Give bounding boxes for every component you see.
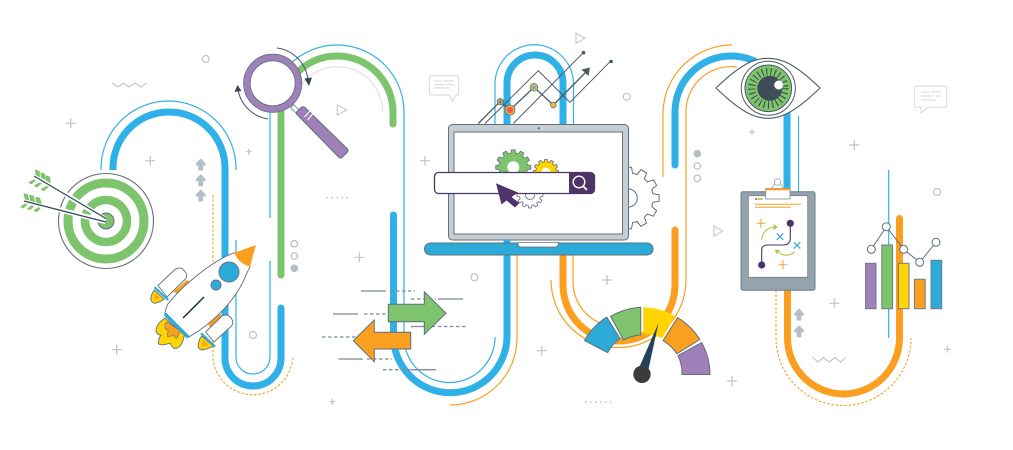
gear outline [598, 167, 659, 229]
thin orange dashed arc left [213, 195, 293, 395]
thin orange outer arc under gauge [551, 67, 737, 348]
background decorations [66, 33, 951, 405]
orange arrow [353, 320, 411, 362]
thick trend line [478, 72, 586, 124]
thin orange inner arc under gauge [573, 250, 600, 323]
target bullseye [98, 213, 114, 229]
gauge orange segment [663, 318, 700, 354]
gauge yellow segment [643, 307, 675, 338]
chart: bar and line chart [866, 223, 942, 309]
gauge needle [637, 323, 658, 376]
laptop frame [448, 124, 628, 240]
speech bubble left [429, 76, 459, 101]
gauge blue segment [584, 317, 620, 353]
winding road lines [101, 45, 911, 406]
booster flame centres [155, 294, 208, 346]
rotation arrows [238, 48, 308, 119]
green gear [496, 150, 531, 185]
white gear hub [526, 190, 534, 200]
thin blue line behind chart [888, 170, 890, 338]
clip orange strip [766, 188, 790, 190]
lens rim [247, 58, 298, 109]
thick blue road first loop [113, 112, 281, 386]
speed lines solid [333, 291, 463, 370]
gauge purple segment [678, 342, 710, 374]
speed lines dashed [322, 291, 466, 370]
paper colour dots [755, 198, 762, 200]
pupil [757, 76, 782, 101]
icon: clipboard [741, 179, 815, 290]
decoration: triple dots right [694, 150, 700, 182]
yellow gear hub [542, 168, 550, 176]
icon: direction arrows with speed lines [322, 291, 466, 370]
decoration: triple dots left [291, 240, 297, 271]
gear hub [619, 189, 637, 207]
arrow heads [234, 78, 312, 92]
thin blue line below eye [798, 116, 800, 195]
thin blue line second loop [236, 45, 495, 382]
laptop screen [454, 132, 622, 234]
handle [296, 107, 348, 158]
laptop camera [538, 127, 540, 130]
zigzag trend arrow [485, 62, 610, 124]
panel: laptop [424, 124, 653, 255]
thick green road [281, 56, 393, 275]
decoration: up arrows left [196, 158, 206, 202]
booster flames [151, 290, 213, 350]
handle bands [304, 110, 313, 120]
orange plus marks [756, 219, 788, 269]
icon: magnifying glass [234, 48, 348, 158]
eye outer ring [741, 61, 795, 115]
icon: eye [716, 58, 820, 118]
handle connector [292, 106, 302, 116]
eye highlight [774, 80, 783, 90]
route path [762, 223, 790, 265]
thin orange arc centre bottom [450, 250, 517, 405]
gauge green segment [610, 307, 641, 340]
thick blue road second loop [394, 55, 563, 393]
thin blue arch over laptop [495, 45, 574, 130]
icon: target with arrows [20, 170, 154, 268]
rocket body [165, 253, 250, 337]
eye lid [716, 58, 820, 118]
arrow heads [582, 51, 613, 76]
trend nodes [497, 84, 556, 115]
paper lines [755, 204, 801, 207]
decoration: zigzag waves [112, 83, 846, 362]
green arrow [388, 292, 446, 334]
clipboard clip [766, 188, 790, 199]
gauge hub [633, 366, 651, 383]
yellow gear [533, 159, 559, 185]
search icon [573, 176, 587, 190]
target outer ring [58, 174, 154, 268]
target green rings [68, 183, 144, 259]
trend points [867, 223, 940, 266]
decoration: play triangles [337, 33, 723, 236]
cursor [496, 183, 520, 208]
blue crosses [777, 233, 800, 249]
decoration: small circles [202, 56, 940, 338]
laptop base [424, 243, 653, 255]
search bar [434, 172, 594, 194]
rocket stripe [183, 297, 204, 318]
booster right [206, 315, 233, 342]
clipboard board [741, 192, 815, 290]
rocket nose [234, 245, 256, 267]
thin blue line first loop [101, 101, 236, 170]
thick orange road right [788, 218, 900, 394]
booster bands [154, 287, 215, 347]
arrow halos [22, 175, 106, 222]
thick blue road to eye [675, 56, 787, 200]
road between screen and base [504, 240, 510, 244]
rocket tail band [165, 314, 188, 337]
arrow shafts [24, 176, 106, 222]
speech bubble right [914, 86, 947, 113]
decoration: dotted lines [326, 198, 611, 402]
thin orange arc above road [663, 45, 732, 177]
chart: gauge [584, 307, 710, 383]
clipboard ring [772, 179, 784, 188]
clipboard paper [748, 196, 808, 277]
booster left [158, 268, 187, 297]
booster connectors [173, 280, 222, 327]
decoration: plus signs [66, 118, 951, 405]
trend line [871, 227, 936, 262]
thin grey arc [292, 67, 383, 113]
green gear hub [507, 161, 519, 173]
iris spokes [752, 72, 785, 105]
thin orange dashed arc right [776, 290, 911, 406]
search button [569, 172, 595, 194]
long trend arrow [513, 53, 583, 124]
rocket windows [211, 262, 239, 290]
laptop notch [518, 242, 558, 247]
green arc arrows [762, 227, 795, 255]
white gear [517, 182, 543, 208]
thick orange road under gauge [563, 230, 675, 341]
bars [866, 245, 942, 309]
rocket main flame [156, 318, 184, 348]
icon: large outline gear [598, 167, 659, 229]
route dots [758, 220, 794, 269]
arrow fletchings [20, 170, 51, 212]
rocket inner flame [165, 322, 180, 338]
iris [745, 65, 792, 112]
green arrow heads [774, 224, 780, 254]
icon: trend lines [478, 51, 613, 124]
lens [247, 58, 298, 109]
icon: rocket [151, 245, 256, 350]
decoration: up arrows right [794, 308, 804, 337]
